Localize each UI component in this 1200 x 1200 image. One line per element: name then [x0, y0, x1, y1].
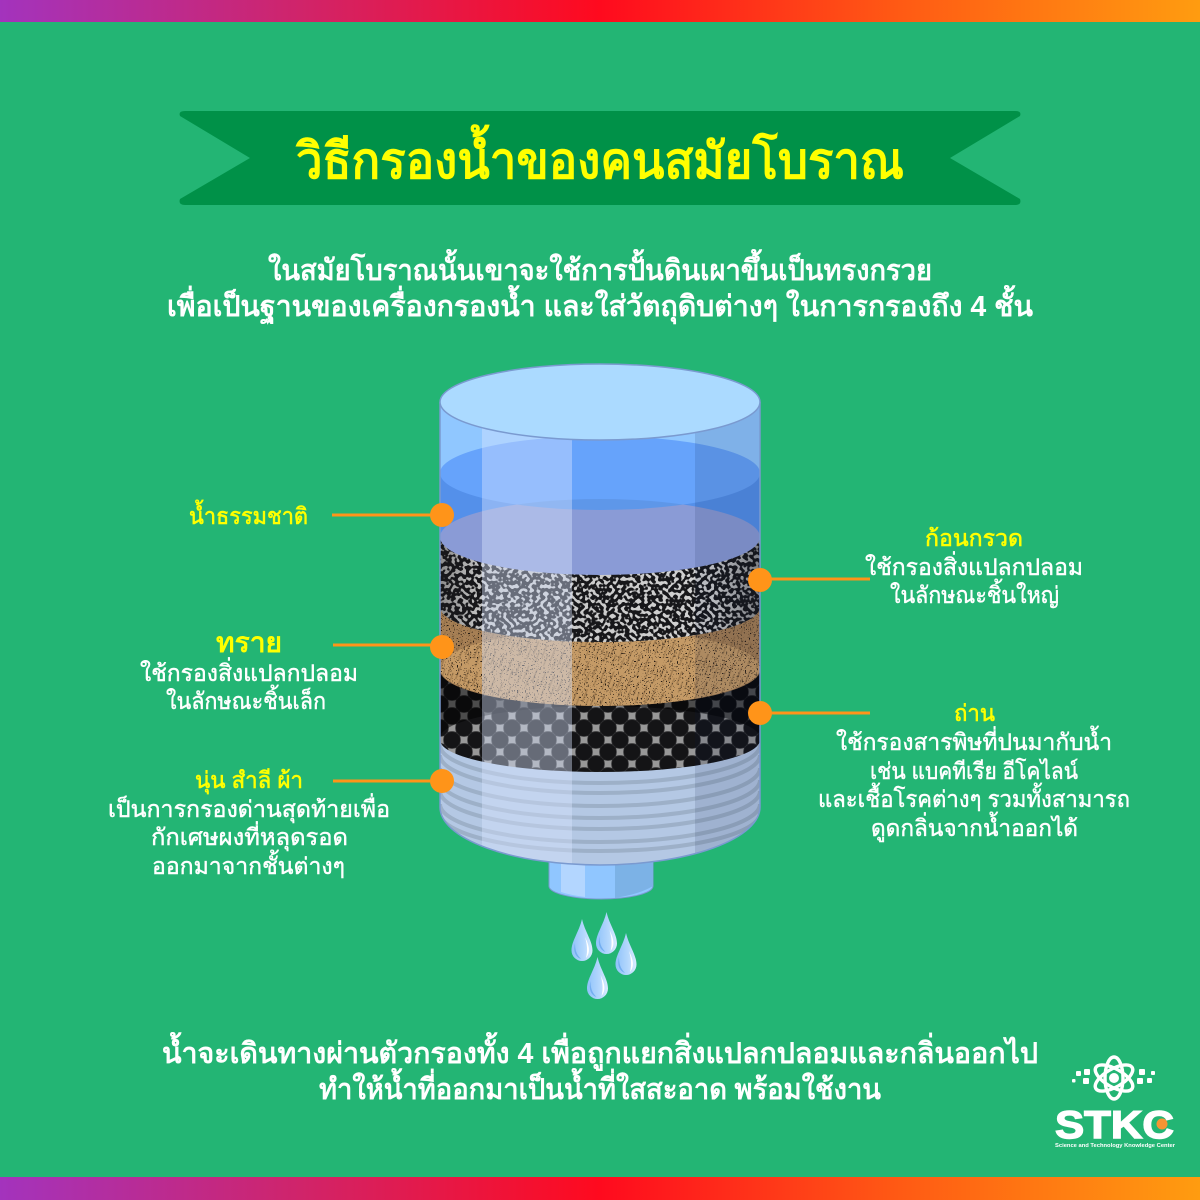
- label: gravel: ก้อนกรวด: [925, 525, 1023, 551]
- label: cotton: ออกมาจากชั้นต่างๆ: [152, 850, 345, 879]
- logo wordmark: STKC: [1055, 1104, 1174, 1147]
- label: sand: ในลักษณะชิ้นเล็ก: [166, 685, 326, 714]
- water surface: [440, 436, 760, 510]
- logo dot: [1156, 1118, 1168, 1130]
- layer: charcoal: [440, 673, 760, 772]
- cylinder outline: [440, 402, 760, 865]
- connector: sand: [333, 635, 454, 659]
- label: gravel: ในลักษณะชิ้นใหญ่: [890, 579, 1059, 608]
- glass above water: [440, 407, 760, 470]
- closing text: น้ำจะเดินทางผ่านตัวกรองทั้ง 4 เพื่อถูกแยกสิ่งแปลกปลอมและกลิ่นออกไป: [162, 1031, 1038, 1071]
- label: charcoal: [818, 700, 1130, 842]
- water side: [440, 476, 760, 534]
- gravel surface through water: [440, 499, 760, 575]
- label: charcoal: ใช้กรองสารพิษที่ปนมากับน้ำ: [836, 726, 1112, 755]
- connector: cotton: [333, 769, 454, 793]
- layer: gravel: [440, 540, 760, 642]
- label: charcoal: เช่น แบคทีเรีย อีโคไลน์: [870, 758, 1078, 784]
- label: charcoal: และเชื้อโรคต่างๆ รวมทั้งสามารถ: [818, 783, 1130, 812]
- connector: charcoal: [748, 701, 870, 725]
- label: cotton: เป็นการกรองด่านสุดท้ายเพื่อ: [108, 793, 390, 823]
- filter cylinder diagram: [440, 364, 760, 899]
- label: cotton: [108, 767, 390, 879]
- layer: cotton: [440, 742, 760, 864]
- label: sand: ใช้กรองสิ่งแปลกปลอม: [140, 657, 358, 686]
- logo tagline: Science and Technology Knowledge Center: [1055, 1143, 1176, 1149]
- label: natural water: น้ำธรรมชาติ: [189, 500, 308, 529]
- label: charcoal: ถ่าน: [954, 700, 995, 726]
- connector: natural water: [332, 503, 454, 527]
- connector: gravel: [748, 568, 870, 592]
- label: cotton: นุ่น สำลี ผ้า: [195, 767, 303, 794]
- intro text: ในสมัยโบราณนั้นเขาจะใช้การปั้นดินเผาขึ้นเป็นทรงกรวย: [268, 248, 932, 287]
- highlight strip: [482, 400, 572, 870]
- closing text: [162, 1031, 1038, 1106]
- intro text: เพื่อเป็นฐานของเครื่องกรองน้ำ และใส่วัตถุดิบต่างๆ ในการกรองถึง 4 ชั้น: [167, 284, 1033, 325]
- label: sand: ทราย: [216, 627, 282, 658]
- closing text: ทำให้น้ำที่ออกมาเป็นน้ำที่ใสสะอาด พร้อมใช้งาน: [319, 1067, 881, 1106]
- label: cotton: กักเศษผงที่หลุดรอด: [151, 821, 348, 851]
- top rim: [440, 364, 760, 440]
- label: sand: [140, 627, 358, 714]
- icon: atom: [1072, 1057, 1155, 1099]
- water drops: [572, 912, 636, 999]
- title: วิธีกรองน้ำของคนสมัยโบราณ: [295, 124, 904, 189]
- bottom gradient bar: [0, 1177, 1200, 1200]
- label: gravel: [865, 525, 1083, 608]
- top gradient bar: [0, 0, 1200, 22]
- spout: [549, 850, 653, 899]
- title banner: [180, 111, 1020, 205]
- shadow strip: [695, 400, 760, 870]
- layer: sand: [440, 610, 760, 706]
- logo: STKC: [1055, 1057, 1176, 1149]
- label: gravel: ใช้กรองสิ่งแปลกปลอม: [865, 551, 1083, 580]
- water and gravel overlap: [520, 499, 682, 510]
- intro text: [167, 248, 1033, 325]
- label: charcoal: ดูดกลิ่นจากน้ำออกได้: [871, 812, 1078, 842]
